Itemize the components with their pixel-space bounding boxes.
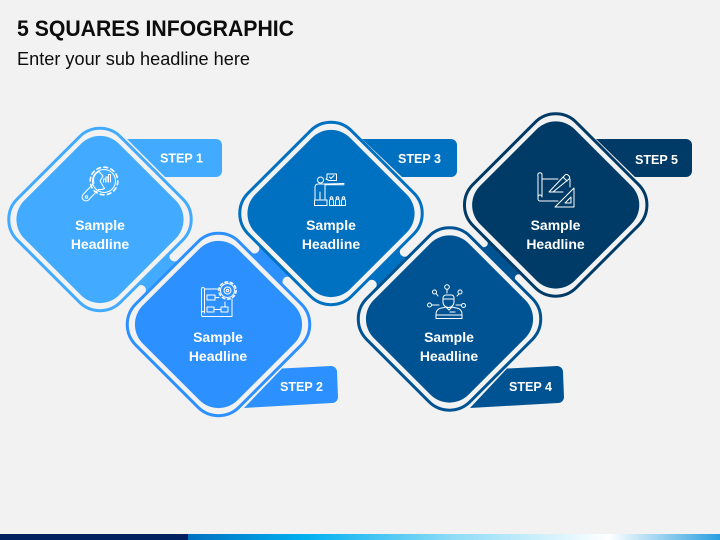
- label: step 1 headline: Headline: [71, 236, 129, 252]
- step 2 label: STEP 2: [280, 379, 323, 394]
- label: step 3 headline: Sample: [306, 217, 356, 233]
- diamond fill: step 3: [236, 119, 426, 308]
- subtitle: Enter your sub headline here: [17, 49, 250, 69]
- tab: step 1: [127, 139, 222, 177]
- diamond outline: step 5: [452, 102, 659, 308]
- label: step 5 headline: Sample: [531, 217, 581, 233]
- bottom bar: gradient segment: [188, 534, 720, 540]
- panel: step 5: [452, 102, 692, 308]
- tab: step 2: [244, 366, 338, 408]
- connector: step 2 to step 3: [233, 227, 308, 302]
- step 1 label: STEP 1: [160, 150, 203, 166]
- diamond outline: step 4: [346, 216, 553, 422]
- icon: person with connected ideas: [428, 285, 466, 318]
- tab: step 5: [596, 139, 692, 177]
- label: step 2 headline: Sample: [193, 329, 243, 345]
- connector: step 4 to step 5: [465, 225, 538, 297]
- connector: step 1 to step 2: [120, 235, 196, 311]
- label: step 4 headline: Sample: [424, 329, 474, 345]
- label: step 2 headline: Headline: [189, 348, 247, 364]
- label: step 1 headline: Sample: [75, 217, 125, 233]
- icon: presenter with audience: [314, 174, 346, 206]
- step 4 label: STEP 4: [509, 379, 553, 394]
- diamond fill: step 2: [124, 230, 313, 419]
- step 5 label: STEP 5: [635, 152, 678, 167]
- label: step 4 headline: Headline: [420, 348, 478, 364]
- panel: step 1: [0, 116, 222, 323]
- step 3 label: STEP 3: [398, 151, 441, 166]
- panel: step 3: [228, 110, 457, 317]
- icon: blueprint with gear: [202, 282, 236, 316]
- diamond fill: step 1: [5, 125, 195, 314]
- connector: step 3 to step 4: [351, 231, 426, 306]
- label: step 5 headline: Headline: [526, 236, 585, 252]
- title: 5 SQUARES INFOGRAPHIC: [17, 16, 294, 41]
- diamond fill: step 5: [461, 110, 650, 300]
- icon: blueprint, pencil and set square: [538, 173, 574, 207]
- icon: wrench and gear with chart: [82, 167, 118, 201]
- diamond outline: step 3: [228, 110, 434, 317]
- panel: step 4: [346, 216, 564, 422]
- tab: step 4: [470, 366, 564, 408]
- tab: step 3: [362, 139, 457, 177]
- diamond fill: step 4: [355, 224, 544, 414]
- label: step 3 headline: Headline: [302, 236, 360, 252]
- panel: step 2: [115, 221, 338, 428]
- bottom bar: navy segment: [0, 534, 188, 540]
- diamond outline: step 1: [0, 116, 203, 323]
- diamond outline: step 2: [115, 221, 322, 428]
